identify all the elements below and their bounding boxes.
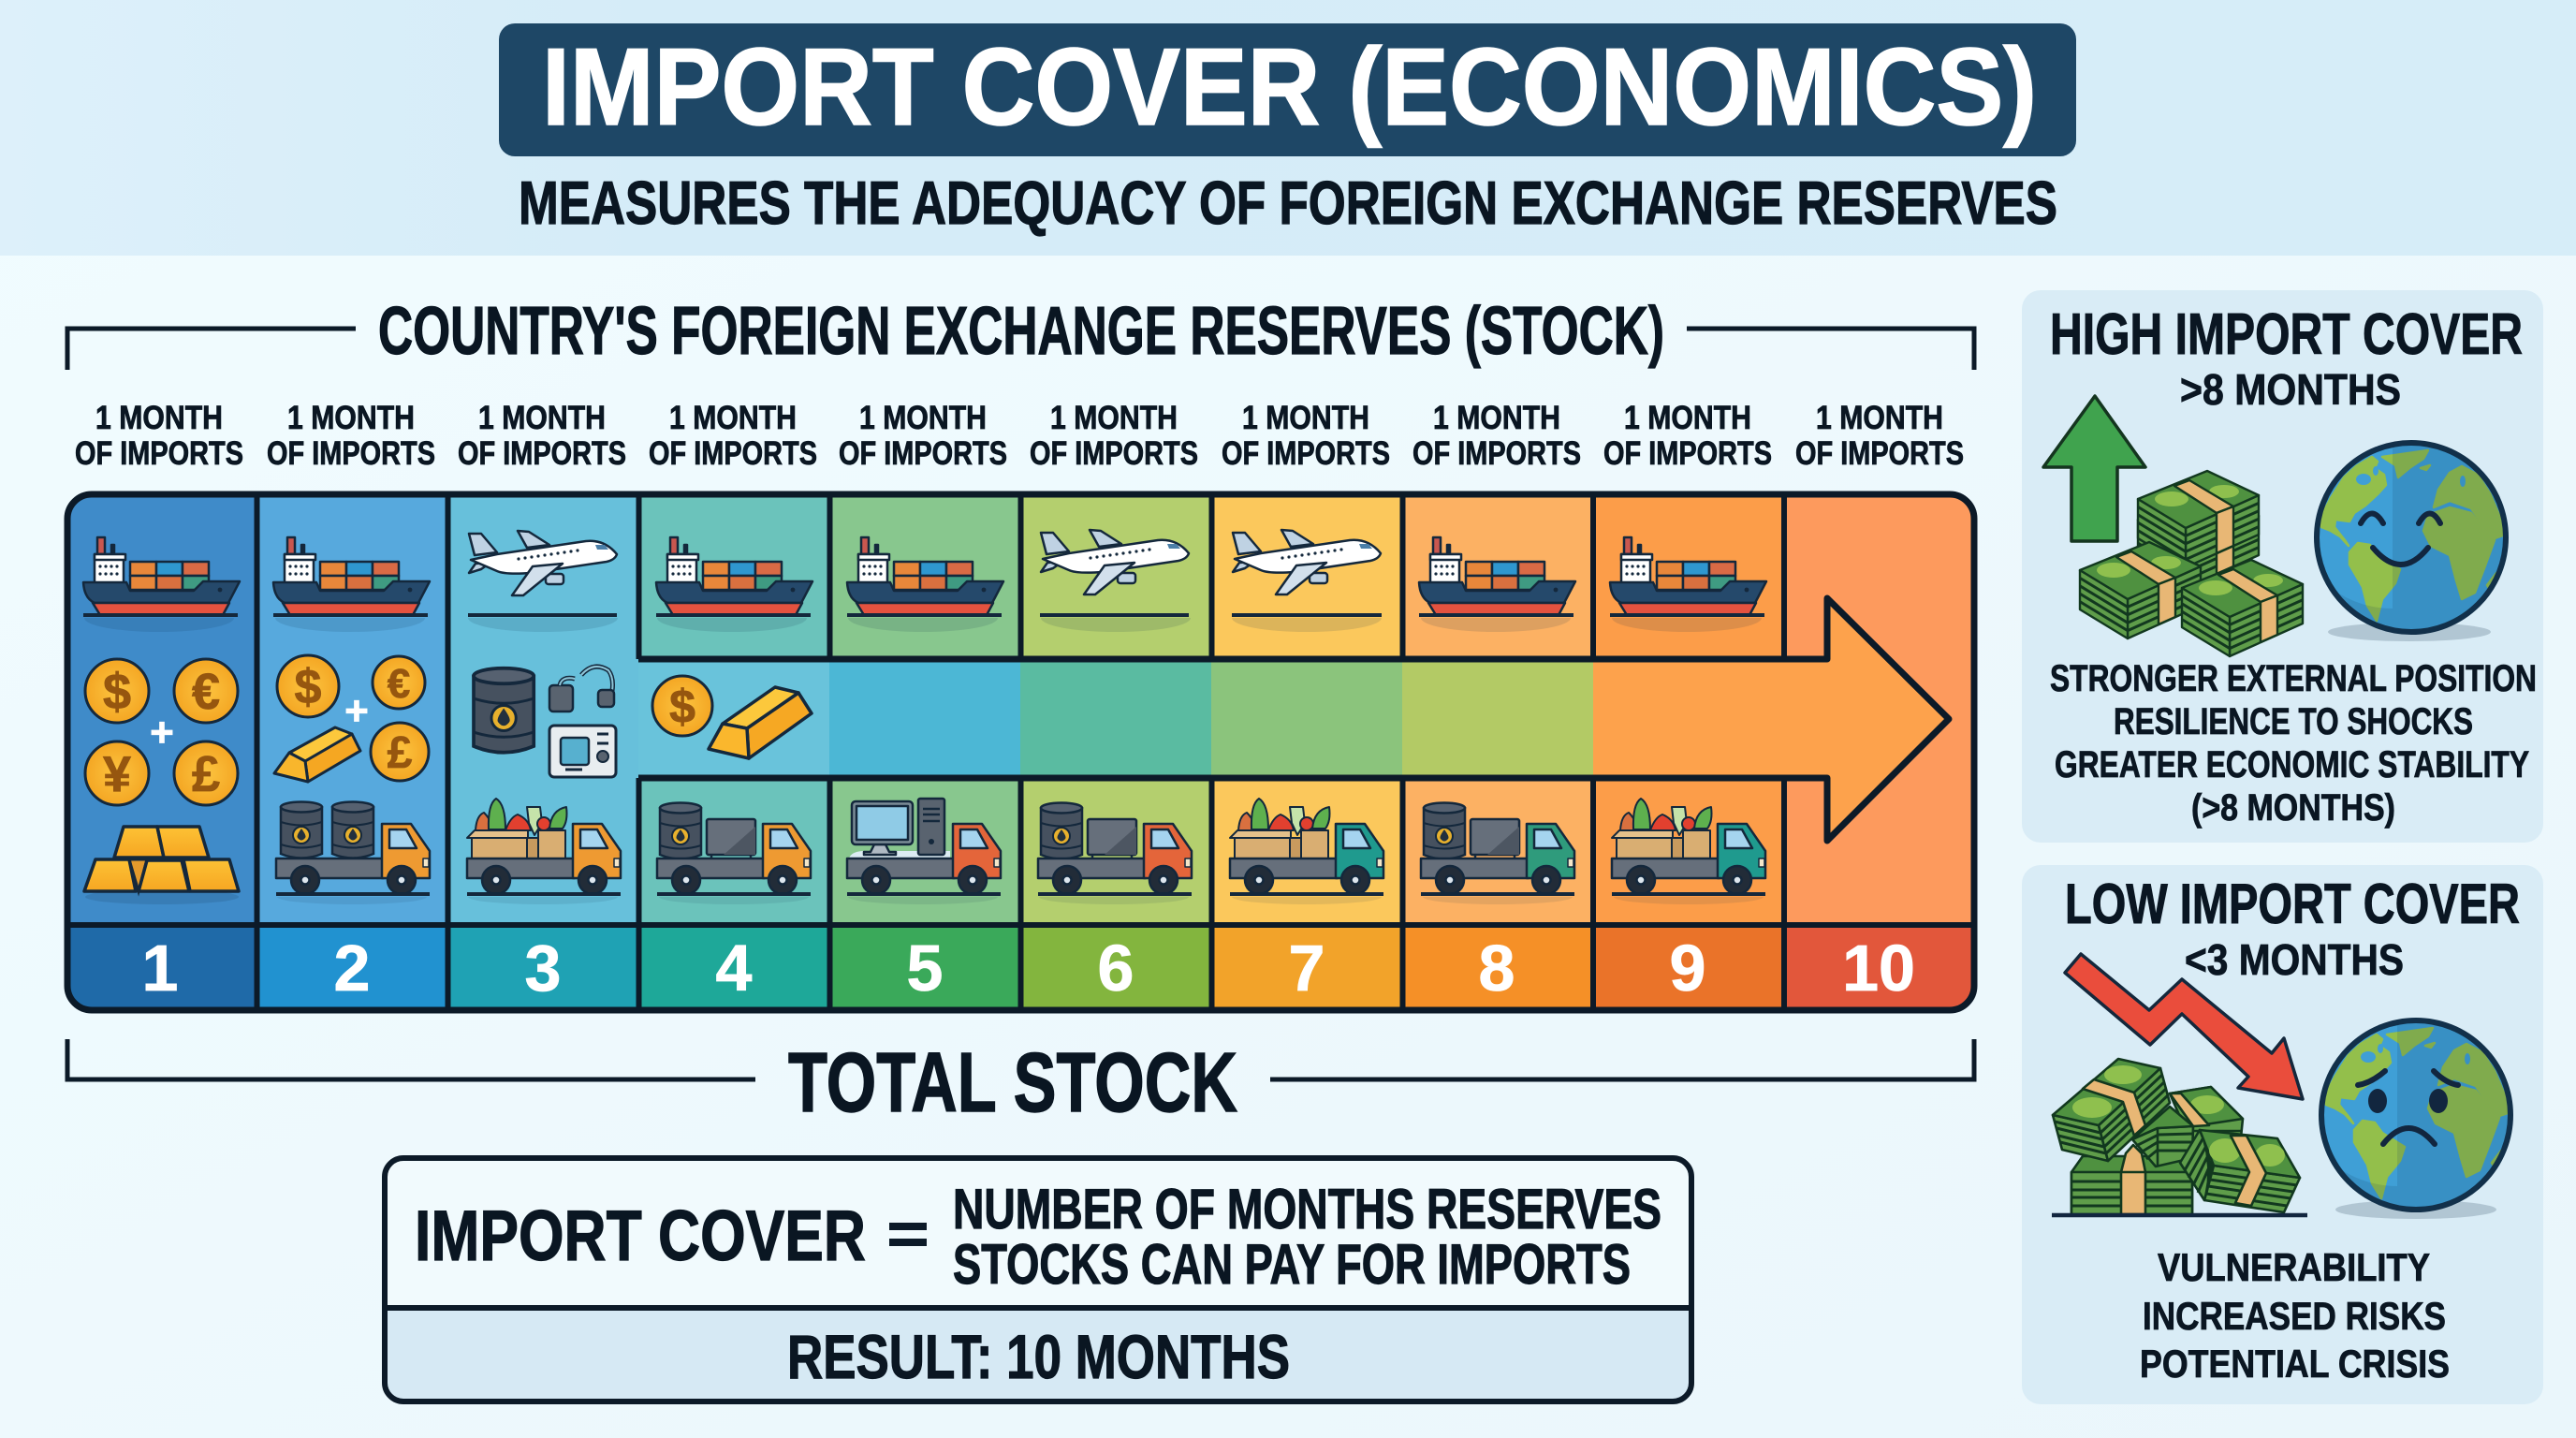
month numbers	[142, 932, 1915, 1005]
label month 1: 1 MONTH	[95, 400, 223, 436]
label month 10: 1 MONTH	[1816, 400, 1943, 436]
formula right side line two: STOCKS CAN PAY FOR IMPORTS	[953, 1233, 1631, 1296]
month numbers: 7	[1289, 932, 1325, 1005]
icon: red falling arrow	[2065, 954, 2303, 1099]
low threshold: <3 MONTHS	[2185, 935, 2404, 984]
label month 8: OF IMPORTS	[1412, 435, 1581, 472]
label month 3: OF IMPORTS	[458, 435, 626, 472]
label month 5: 1 MONTH	[859, 400, 987, 436]
low consequences: VULNERABILITY	[2158, 1245, 2430, 1289]
month numbers: 8	[1479, 932, 1515, 1005]
label month 7: OF IMPORTS	[1222, 435, 1390, 472]
label month 1: OF IMPORTS	[75, 435, 243, 472]
panel: low import cover	[2022, 865, 2543, 1404]
label month 8	[1412, 400, 1581, 472]
icon: cash stacks	[2080, 471, 2303, 656]
low consequences: INCREASED RISKS	[2143, 1294, 2446, 1338]
heading: reserves stock with bracket: COUNTRY'S FOREIGN EXCHANGE RESERVES (STOCK)	[378, 294, 1664, 369]
icon: currency coins column 1: £	[192, 746, 220, 802]
panel: high import cover	[2022, 290, 2543, 843]
icon: happy globe	[2314, 440, 2509, 641]
label month 1	[75, 400, 243, 472]
label month 9: OF IMPORTS	[1603, 435, 1772, 472]
label month 6	[1030, 400, 1198, 472]
ship and plane shadows	[84, 618, 1762, 632]
equals sign	[889, 1223, 927, 1246]
title: IMPORT COVER (ECONOMICS)	[542, 25, 2037, 148]
label month 4: 1 MONTH	[669, 400, 797, 436]
column dividers	[67, 494, 1974, 1010]
total stock heading with bracket: TOTAL STOCK	[788, 1036, 1237, 1130]
label month 7: 1 MONTH	[1242, 400, 1369, 436]
label month 9	[1603, 400, 1772, 472]
label month 4	[649, 400, 817, 472]
label month 9: 1 MONTH	[1624, 400, 1751, 436]
tilted left stack	[2053, 1059, 2170, 1161]
icon: coins and gold column 2: £	[388, 728, 413, 778]
centre stack	[2132, 1107, 2193, 1167]
panel: ten month stock bar	[67, 494, 1975, 1011]
label month 8: 1 MONTH	[1433, 400, 1560, 436]
icon: currency coins column 1: €	[192, 664, 220, 720]
bottom flat stack	[2071, 1145, 2192, 1214]
low consequences: POTENTIAL CRISIS	[2140, 1342, 2450, 1386]
high threshold: >8 MONTHS	[2180, 365, 2401, 414]
formula left side: IMPORT COVER	[415, 1196, 866, 1276]
month numbers: 2	[334, 932, 370, 1005]
label month 5: OF IMPORTS	[839, 435, 1007, 472]
icon: truck barrel and screen column 6	[1038, 803, 1192, 894]
panel: formula	[385, 1158, 1691, 1401]
header band	[0, 0, 2576, 256]
total stock heading with bracket	[67, 1036, 1974, 1130]
icon: truck barrel and screen column 4	[657, 803, 811, 894]
label month 6: OF IMPORTS	[1030, 435, 1198, 472]
result: RESULT: 10 MONTHS	[787, 1322, 1290, 1391]
icon: gold bars column 1	[84, 827, 239, 904]
icon: coin and gold bar inside arrow	[652, 676, 812, 758]
icon: truck food column 3	[467, 799, 621, 894]
low consequences	[2140, 1245, 2450, 1386]
label month 2: 1 MONTH	[287, 400, 415, 436]
icon: coins and gold column 2: $	[295, 660, 322, 714]
label month 2: OF IMPORTS	[267, 435, 435, 472]
icon: currency coins column 1	[85, 659, 238, 805]
high benefits: (>8 MONTHS)	[2191, 787, 2395, 829]
icon: currency coins column 1: $	[103, 664, 131, 720]
label month 3: 1 MONTH	[478, 400, 606, 436]
column backgrounds and number row	[67, 494, 1975, 1011]
icon: collapsing cash stacks	[2052, 1059, 2307, 1215]
arrow through the stock	[638, 598, 1949, 841]
month numbers: 4	[716, 932, 753, 1005]
icon: coins and gold column 2	[274, 655, 429, 782]
icon: currency coins column 1: +	[150, 710, 174, 756]
icon: sad globe	[2319, 1018, 2513, 1219]
subtitle: MEASURES THE ADEQUACY OF FOREIGN EXCHANGE RESERVES	[519, 169, 2057, 237]
label month 4: OF IMPORTS	[649, 435, 817, 472]
label month 3	[458, 400, 626, 472]
icon: truck barrel and screen column 8	[1421, 803, 1574, 894]
icon: truck barrels column 2	[276, 801, 430, 894]
label month 2	[267, 400, 435, 472]
month numbers: 10	[1842, 932, 1915, 1005]
label month 6: 1 MONTH	[1050, 400, 1178, 436]
label month 7	[1222, 400, 1390, 472]
column labels	[75, 400, 1964, 472]
month numbers: 9	[1670, 932, 1705, 1005]
outer border	[67, 494, 1974, 1010]
icon: oil barrel, cable and appliance column 3	[474, 667, 616, 777]
icon: cargo ships and planes on top row	[83, 530, 1766, 615]
month numbers: 1	[142, 932, 178, 1005]
tilted right stack	[2180, 1130, 2300, 1212]
icon: truck computer column 5	[847, 799, 1001, 894]
icon: truck food column 7	[1230, 799, 1383, 894]
month numbers: 6	[1098, 932, 1134, 1005]
high benefits: RESILIENCE TO SHOCKS	[2114, 701, 2473, 742]
icon: coins and gold column 2: +	[344, 688, 369, 734]
icon: currency coins column 1: ¥	[103, 746, 131, 802]
truck shadows	[277, 897, 1764, 904]
month numbers: 3	[525, 932, 561, 1005]
icon: coin and gold bar inside arrow: $	[669, 681, 695, 733]
icon: truck food column 9	[1612, 799, 1765, 894]
icon: green up arrow	[2043, 396, 2145, 541]
label month 10	[1795, 400, 1964, 472]
label month 5	[839, 400, 1007, 472]
icon: coins and gold column 2: €	[388, 661, 410, 707]
high benefits	[2050, 658, 2537, 829]
back stack	[2170, 1087, 2243, 1147]
label month 10: OF IMPORTS	[1795, 435, 1964, 472]
formula right side: NUMBER OF MONTHS RESERVES	[953, 1178, 1661, 1240]
month numbers: 5	[907, 932, 943, 1005]
